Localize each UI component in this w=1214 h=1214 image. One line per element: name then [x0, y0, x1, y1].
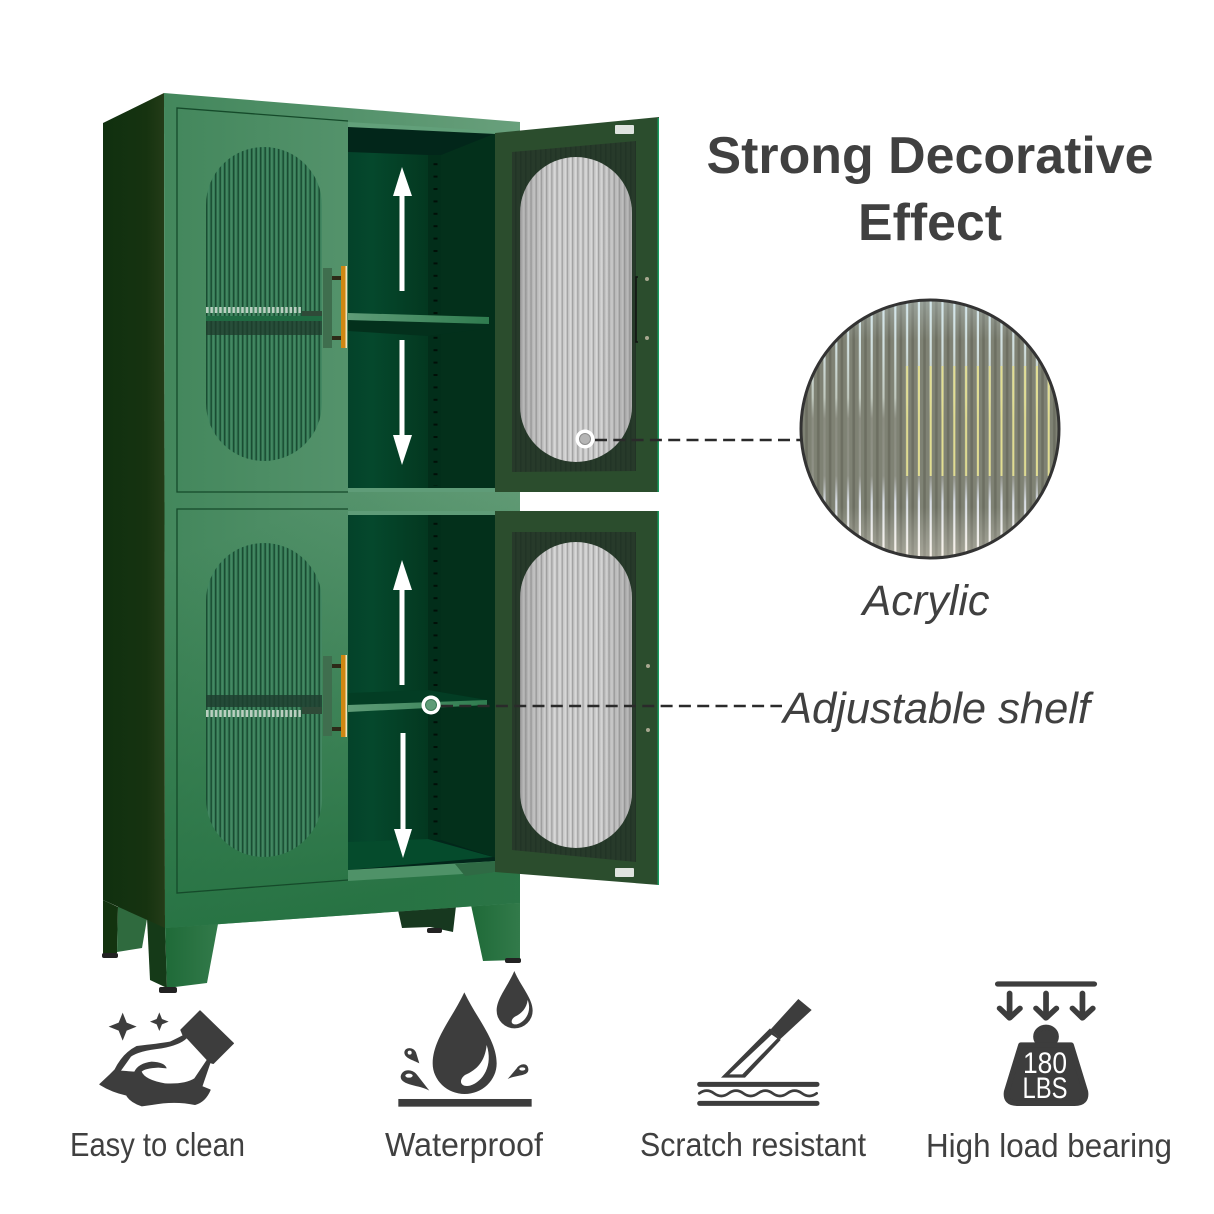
- door hinge, upper: [636, 277, 649, 342]
- title: [706, 127, 1154, 252]
- feature: waterproof: [385, 971, 544, 1163]
- label: Waterproof: [385, 1126, 544, 1163]
- upper interior: [348, 122, 496, 492]
- feature: easy to clean: [70, 1011, 245, 1163]
- cabinet: [102, 93, 659, 993]
- icon: water drops: [398, 971, 533, 1107]
- label: High load bearing: [926, 1127, 1172, 1164]
- lower right open door: [495, 511, 659, 885]
- icon: hand wiping: [100, 1011, 233, 1106]
- label: acrylic: Acrylic: [859, 577, 990, 625]
- lower shelf: [348, 690, 487, 712]
- feature: scratch resistant: [640, 999, 866, 1163]
- arrow: upper shelf up: [393, 167, 412, 291]
- icon: load weight: 180: [1023, 1047, 1067, 1080]
- label: Easy to clean: [70, 1126, 245, 1163]
- door handle, lower: [323, 655, 347, 737]
- fluted oval window, upper: [206, 147, 322, 461]
- arrow: lower shelf down: [394, 733, 412, 858]
- callout line: adjustable shelf: [422, 696, 782, 714]
- arrow: upper shelf down: [393, 340, 412, 465]
- door label plate, upper: [615, 125, 634, 134]
- door handle, upper: [323, 266, 347, 348]
- upper shelf: [348, 313, 489, 336]
- label: Scratch resistant: [640, 1126, 866, 1163]
- fluted oval window, lower: [206, 543, 322, 857]
- arrow: lower shelf up: [393, 560, 412, 685]
- upper right open door: [495, 117, 659, 492]
- acrylic panel, lower door: [520, 542, 632, 848]
- title: Strong Decorative: [706, 127, 1154, 185]
- cabinet front frame: [164, 93, 520, 928]
- acrylic panel, upper door: [520, 157, 632, 462]
- door label plate, lower: [615, 868, 634, 877]
- lower interior: [348, 511, 496, 881]
- icon: load weight: [998, 984, 1094, 1105]
- callout line: acrylic: [576, 430, 802, 448]
- upper left door: [177, 108, 348, 492]
- door hinge, lower: [646, 664, 650, 732]
- feature: high load bearing: [926, 984, 1172, 1164]
- label: adjustable shelf: Adjustable shelf: [780, 684, 1095, 733]
- title: Effect: [858, 194, 1002, 252]
- cabinet legs: [102, 900, 521, 993]
- cabinet side panel: [103, 93, 165, 928]
- acrylic magnified detail circle: [800, 299, 1060, 559]
- icon: blade on layered surface: [699, 999, 817, 1103]
- icon: load weight: LBS: [1022, 1072, 1068, 1105]
- lower left door: [177, 509, 348, 893]
